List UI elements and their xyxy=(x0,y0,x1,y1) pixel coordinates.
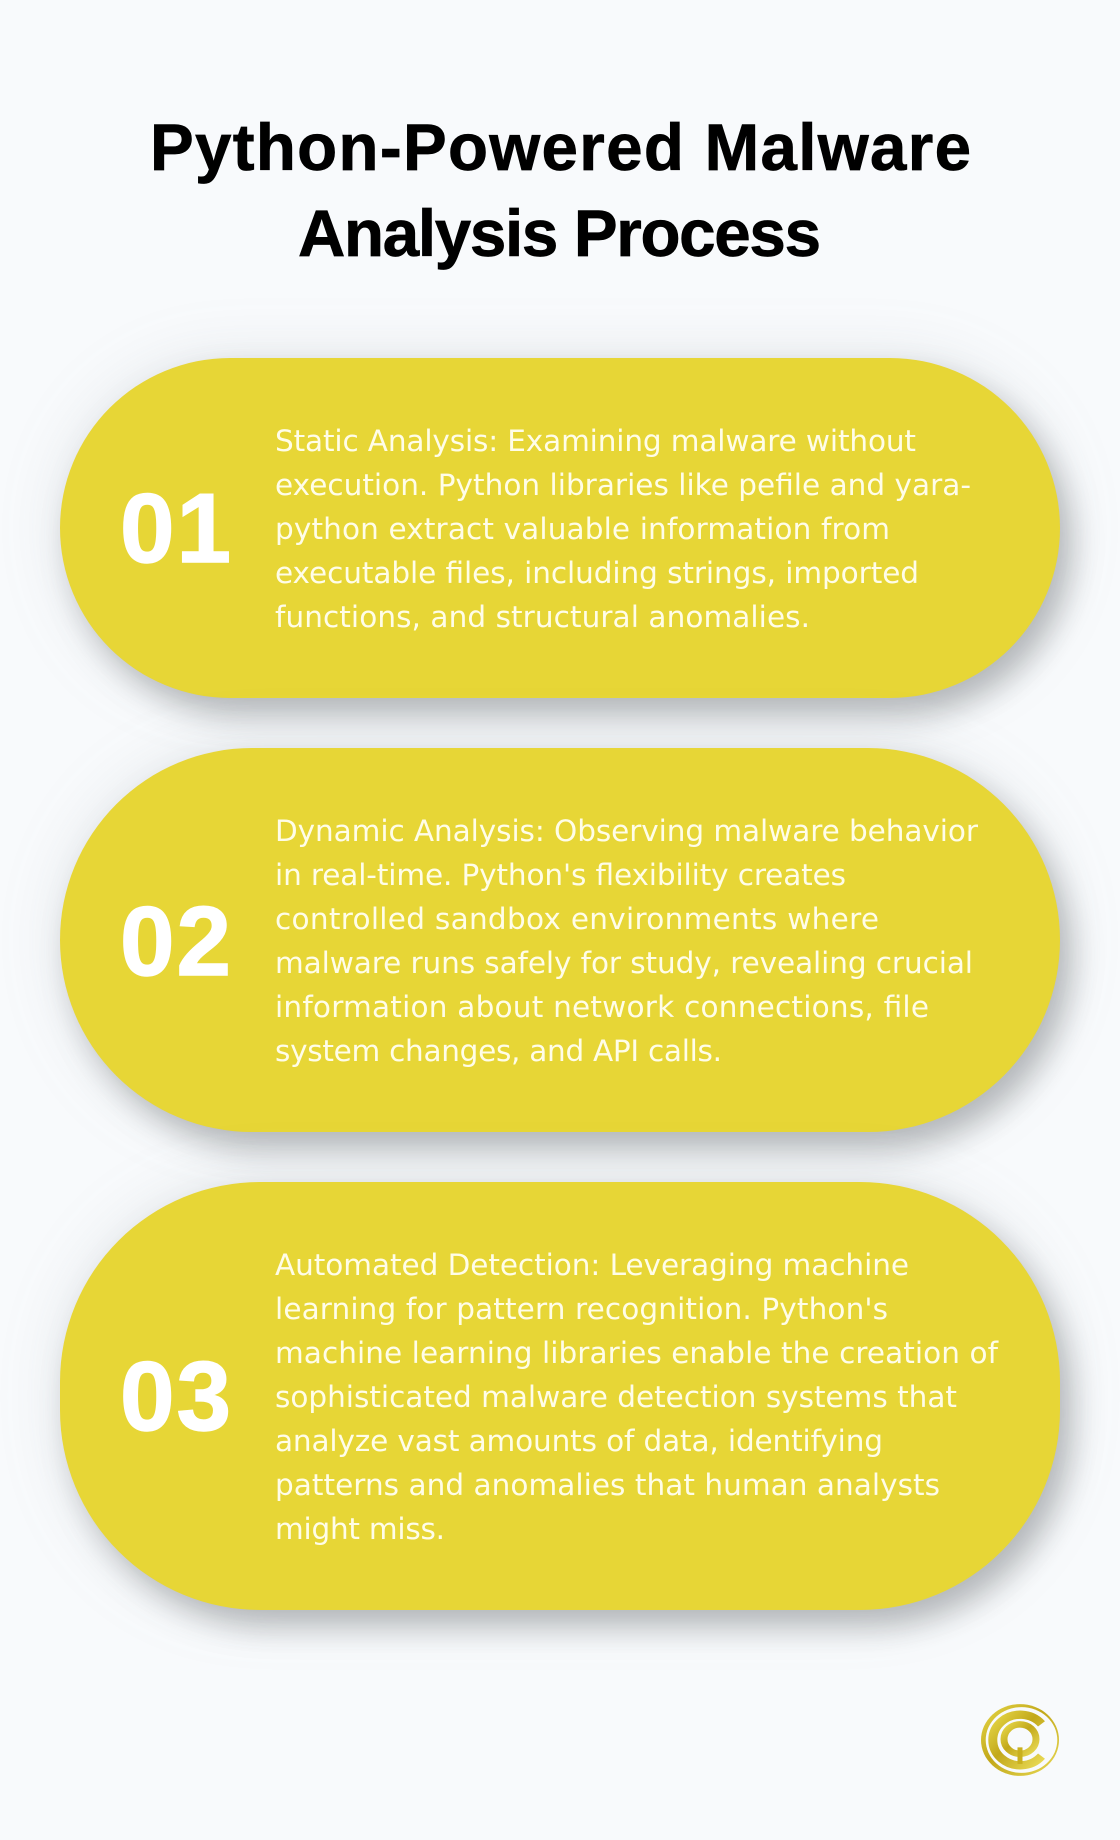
description 01: execution. Python libraries like pefile and yara- xyxy=(275,468,971,502)
panel: step 02 dynamic analysis xyxy=(60,748,1060,1132)
title xyxy=(150,111,971,270)
title: Python-Powered Malware xyxy=(150,111,971,184)
description 01: Static Analysis: Examining malware without xyxy=(275,424,916,458)
description 03: Automated Detection: Leveraging machine xyxy=(275,1248,909,1282)
description 02: malware runs safely for study, revealing crucial xyxy=(275,946,973,980)
description 02: Dynamic Analysis: Observing malware behavior xyxy=(275,814,979,848)
icon: gold circular logo xyxy=(981,1704,1059,1776)
description 01 xyxy=(275,424,971,634)
description 02: information about network connections, file xyxy=(275,990,929,1024)
step number 02: 02 xyxy=(120,886,233,996)
description 03: sophisticated malware detection systems that xyxy=(275,1380,957,1414)
pill background 03 xyxy=(60,1182,1060,1610)
description 03: analyze vast amounts of data, identifying xyxy=(275,1424,883,1458)
description 02: in real-time. Python's flexibility creates xyxy=(275,858,846,892)
panel: step 03 automated detection xyxy=(60,1182,1060,1610)
description 03 xyxy=(275,1248,999,1546)
description 01: executable files, including strings, imported xyxy=(275,556,919,590)
description 03: learning for pattern recognition. Python's xyxy=(275,1292,888,1326)
description 01: python extract valuable information from xyxy=(275,512,890,546)
title: Analysis Process xyxy=(298,197,821,270)
pill background 02 xyxy=(60,748,1060,1132)
description 03: machine learning libraries enable the creation of xyxy=(275,1336,999,1370)
step number 03: 03 xyxy=(120,1341,233,1451)
description 01: functions, and structural anomalies. xyxy=(275,600,810,634)
description 02: system changes, and API calls. xyxy=(275,1034,722,1068)
description 03: might miss. xyxy=(275,1512,445,1546)
step number 01: 01 xyxy=(120,473,233,583)
description 02: controlled sandbox environments where xyxy=(275,902,879,936)
panel: step 01 static analysis xyxy=(60,358,1060,698)
pill background 01 xyxy=(60,358,1060,698)
description 02 xyxy=(275,814,979,1068)
description 03: patterns and anomalies that human analysts xyxy=(275,1468,940,1502)
